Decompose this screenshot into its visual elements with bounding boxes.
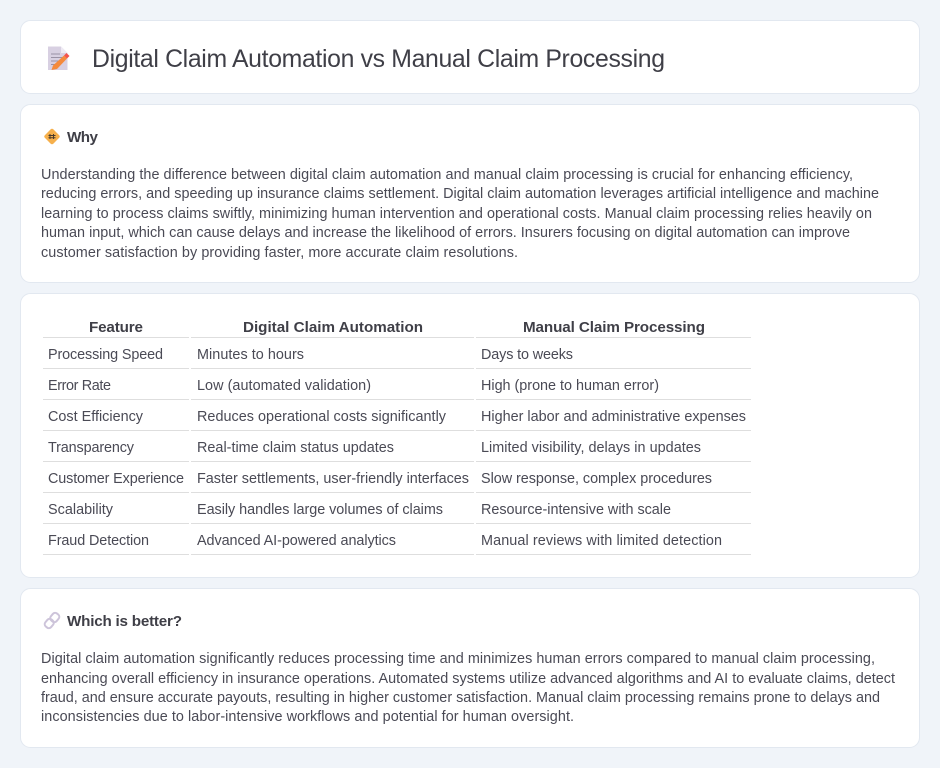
panel: title xyxy=(20,20,920,94)
row: scalability: Easily handles large volumes of claims xyxy=(197,502,443,518)
row: cost efficiency: Cost Efficiency xyxy=(48,409,144,425)
icon: orange diamond sign xyxy=(44,128,60,145)
panel: why xyxy=(20,104,920,282)
text block: why: customer satisfaction by providing faster, more accurate claim resolutions. xyxy=(41,245,518,261)
text block: why: learning to process claims swiftly, minimizing human intervention and operational costs. Manual claim processing relies heavily on xyxy=(41,206,872,222)
text block: which is better: fraud, and ensure accurate payouts, resulting in higher customer satisfaction. Manual claim processing remains prone to delays and xyxy=(41,690,880,706)
row: fraud detection: Manual reviews with limited detection xyxy=(481,533,722,549)
row: transparency: Transparency xyxy=(48,440,135,456)
table header: Manual Claim Processing xyxy=(523,319,705,336)
row: cost efficiency: Higher labor and administrative expenses xyxy=(481,409,746,425)
row: customer experience: Customer Experience xyxy=(48,471,184,487)
row: customer experience: Faster settlements, user-friendly interfaces xyxy=(197,471,469,487)
table header: Feature xyxy=(89,319,143,336)
row: scalability: Resource-intensive with scale xyxy=(481,502,671,518)
text block: why: human input, which can cause delays and increase the likelihood of errors. Insurers focusing on digital automation can improve xyxy=(41,225,850,241)
panel: which is better xyxy=(20,588,920,748)
row: transparency: Real-time claim status updates xyxy=(197,440,394,456)
row: fraud detection: Advanced AI-powered analytics xyxy=(197,533,396,549)
row: processing speed: Days to weeks xyxy=(481,347,573,363)
row: error rate: Error Rate xyxy=(48,378,111,394)
title text: Digital Claim Automation vs Manual Claim Processing xyxy=(92,46,665,73)
icon: link xyxy=(43,612,61,629)
row: error rate: Low (automated validation) xyxy=(197,378,371,394)
icon: document with pencil xyxy=(48,46,70,70)
row: processing speed xyxy=(43,347,751,368)
panel: comparison table xyxy=(20,294,920,578)
row: transparency: Limited visibility, delays in updates xyxy=(481,440,701,456)
row: processing speed: Minutes to hours xyxy=(197,347,304,363)
row: fraud detection: Fraud Detection xyxy=(48,533,149,549)
heading: which is better: Which is better? xyxy=(67,613,182,630)
row: scalability: Scalability xyxy=(48,502,114,518)
heading: why: Why xyxy=(67,129,99,146)
row: scalability xyxy=(43,502,751,524)
row: customer experience xyxy=(43,471,751,492)
row: cost efficiency: Reduces operational costs significantly xyxy=(197,409,447,425)
row: customer experience: Slow response, complex procedures xyxy=(481,471,712,487)
row: processing speed: Processing Speed xyxy=(48,347,163,363)
text block: why: reducing errors, and speeding up insurance claims settlement. Digital claim automation leverages artificial intelligence and machine xyxy=(41,186,879,202)
row: cost efficiency xyxy=(43,409,751,430)
text block: which is better: enhancing overall efficiency in insurance operations. Automated systems utilize advanced algorithms and AI to evaluate claims, detect xyxy=(41,671,895,687)
table header: Digital Claim Automation xyxy=(243,319,423,336)
table header xyxy=(43,319,751,338)
row: transparency xyxy=(43,440,751,462)
row: error rate xyxy=(43,378,751,400)
text block: which is better: Digital claim automation significantly reduces processing time and minimizes human errors compared to manual claim processing, xyxy=(41,651,875,667)
row: error rate: High (prone to human error) xyxy=(481,378,659,394)
text block: which is better: inconsistencies due to labor-intensive workflows and potential for human oversight. xyxy=(41,709,574,725)
text block: why: Understanding the difference between digital claim automation and manual claim processing is crucial for enhancing efficiency, xyxy=(41,167,853,183)
text block: why xyxy=(41,167,879,261)
row: fraud detection xyxy=(43,533,751,554)
text block: which is better xyxy=(41,651,895,725)
